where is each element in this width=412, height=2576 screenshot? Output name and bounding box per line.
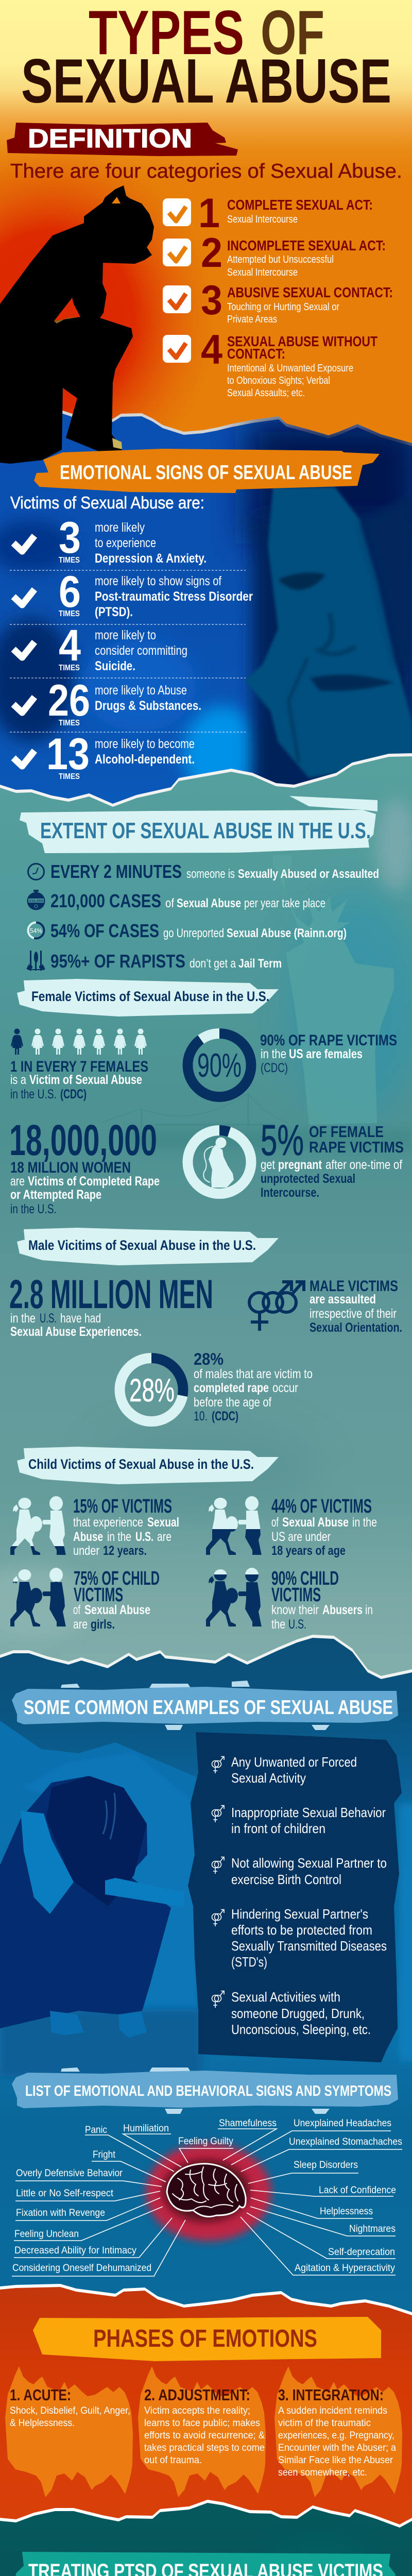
photo: grieving woman's face	[245, 487, 412, 778]
stat: 1 in every 7 females: Victim of Sexual Abuse	[29, 1073, 142, 1087]
stat: 5 percent of female rape victims: unprotected Sexual	[261, 1172, 355, 1186]
stat: 28 percent of males: 28%	[194, 1350, 224, 1368]
stat: 2.8 million men: have had	[60, 1311, 101, 1326]
label: feeling unclean	[14, 2207, 163, 2241]
phase: integration: seen somewhere, etc.	[278, 2467, 367, 2478]
stat: 28 percent of males: before the age of	[194, 1395, 271, 1410]
label: unexplained stomachaches: Unexplained Stomachaches	[289, 2137, 402, 2147]
heading: child victims	[17, 1447, 279, 1484]
stat: 90 percent child victims: VICTIMS	[271, 1584, 321, 1606]
panel: definition background	[0, 0, 412, 497]
row: 3 times	[13, 513, 207, 566]
row: 26 times: 26	[48, 676, 90, 725]
example 4: efforts to be protected from	[231, 1922, 372, 1938]
phase: adjustment: takes practical steps to come	[144, 2443, 265, 2453]
heading: child victims: Child Victims of Sexual Abuse in the U.S.	[28, 1456, 254, 1472]
stat: 2.8 million men: in the	[10, 1311, 36, 1326]
example 4: Sexually Transmitted Diseases	[231, 1938, 387, 1954]
stat: every 2 minutes	[28, 861, 379, 882]
row: 26 times: Drugs & Substances.	[95, 699, 201, 713]
phase: acute: Shock, Disbelief, Guilt, Anger,	[10, 2405, 130, 2416]
stat: 90 percent child victims: the	[271, 1617, 285, 1632]
chart: 28 percent donut	[119, 1358, 183, 1421]
stat: 2.8 million men: 2.8 MILLION MEN	[9, 1271, 213, 1317]
item 2	[163, 230, 386, 278]
chart: 90 percent donut	[187, 1033, 251, 1097]
row: 6 times: TIMES	[59, 609, 80, 618]
phase: integration: 3. INTEGRATION:	[278, 2386, 384, 2404]
item 2: 2	[201, 230, 222, 276]
label: decreased ability for intimacy	[14, 2218, 172, 2258]
example 5: someone Drugged, Drunk,	[231, 2006, 365, 2021]
row: 4 times: consider committing	[95, 643, 187, 658]
heading: male victims	[17, 1228, 279, 1265]
label: agitation and hyperactivity: Agitation & Hyperactivity	[295, 2263, 395, 2274]
phase: acute	[5, 2366, 133, 2497]
photo: silhouette of bent-over figure	[0, 185, 154, 464]
stat: 1 in every 7 females: 1 IN EVERY 7 FEMALES	[10, 1058, 148, 1075]
label: agitation and hyperactivity	[241, 2217, 396, 2275]
label: sleep disorders: Sleep Disorders	[294, 2160, 358, 2171]
heading: signs and symptoms	[12, 2067, 398, 2114]
chart: 5 percent pregnancy donut	[187, 1130, 251, 1194]
item 4: SEXUAL ABUSE WITHOUT	[227, 333, 377, 349]
icon: children 90 percent filled	[206, 1568, 262, 1626]
example 1	[212, 1754, 357, 1786]
stat: male victims orientation	[310, 1278, 402, 1335]
text: four categories intro: There are four categories of Sexual Abuse.	[10, 160, 402, 182]
stat: 2.8 million men: U.S.	[40, 1311, 57, 1326]
stat: 18 million women: are	[10, 1174, 25, 1189]
stat: 44 percent of victims: 18 years of age	[271, 1544, 346, 1558]
stat: 1 in every 7 females: is a	[10, 1073, 26, 1087]
icon: jail bars	[26, 951, 45, 971]
example 2: Inappropriate Sexual Behavior	[231, 1805, 386, 1820]
label: nightmares	[250, 2207, 396, 2236]
icon: children 44 percent filled	[206, 1496, 262, 1555]
stat: 15 percent of victims: 15% OF VICTIMS	[73, 1496, 172, 1517]
row: 13 times: 13	[46, 730, 90, 779]
label: little or no self-respect: Little or No Self-respect	[16, 2188, 114, 2199]
stat: every 2 minutes: Sexually Abused or Assaulted	[238, 867, 379, 881]
item 1: 1	[198, 190, 220, 236]
glow behind brain	[146, 2143, 271, 2241]
item 3: Private Areas	[227, 314, 277, 325]
item 4: Intentional & Unwanted Exposure	[227, 363, 353, 374]
pictogram: 1 in 7 females	[11, 1028, 147, 1055]
heading: common examples	[12, 1681, 398, 1730]
stat: 5 percent of female rape victims: pregnant	[278, 1158, 322, 1172]
label: lack of confidence: Lack of Confidence	[319, 2185, 396, 2196]
label: overly defensive behavior	[15, 2168, 162, 2187]
stat: 95% of rapists: don’t get a	[190, 957, 236, 971]
row: 3 times: Depression & Anxiety.	[95, 551, 207, 566]
stat: 44 percent of victims: of	[271, 1515, 279, 1530]
icon: clock	[28, 863, 44, 880]
panel: treating PTSD background	[0, 2500, 412, 2576]
icon: 54 percent ring	[28, 922, 44, 939]
stat: 15 percent of victims: 12 years.	[103, 1544, 147, 1558]
phase: integration: Encounter with the Abuser; a	[278, 2443, 396, 2453]
icon: pregnant woman	[203, 1138, 234, 1188]
panel: examples list	[188, 1732, 402, 2062]
label: panic: Panic	[85, 2125, 107, 2136]
row: 26 times: TIMES	[59, 719, 80, 727]
phase: adjustment: learns to face public; makes	[144, 2418, 260, 2429]
label: shamefulness: Shamefulness	[219, 2118, 277, 2129]
text: victims intro: Victims of Sexual Abuse are:	[10, 493, 204, 512]
row: 6 times: 6	[59, 567, 81, 617]
label: humiliation	[123, 2123, 181, 2167]
stat: 54% of cases: Sexual Abuse (Rainn.org)	[227, 926, 347, 940]
photo: statue of liberty	[273, 855, 394, 1125]
icon: children 75 percent filled	[10, 1568, 66, 1626]
label: fixation with revenge: Fixation with Revenge	[16, 2208, 105, 2218]
item 1: COMPLETE SEXUAL ACT:	[227, 197, 373, 213]
example 1: Any Unwanted or Forced	[231, 1754, 357, 1770]
phase: acute: 1. ACUTE:	[10, 2386, 71, 2404]
icon: stopwatch	[27, 890, 45, 910]
panel: phases background	[0, 2284, 412, 2548]
chart: 90 percent donut: 90%	[197, 1046, 242, 1084]
label: lack of confidence	[250, 2185, 396, 2196]
item 2: Attempted but Unsuccessful	[227, 254, 334, 265]
stat: 90 percent of rape victims: (CDC)	[261, 1061, 288, 1075]
stat: 54% of cases: 54% OF CASES	[50, 920, 159, 941]
stat: 90 percent of rape victims: in the	[261, 1047, 286, 1061]
stat: 15 percent of victims: under	[73, 1544, 99, 1558]
phase: adjustment: Victim accepts the reality;	[144, 2405, 250, 2416]
example 2: in front of children	[231, 1821, 325, 1836]
stat: 18 million women: Victims of Completed Rape	[28, 1174, 160, 1189]
phase: integration: A sudden incident reminds	[278, 2405, 387, 2416]
row: 13 times: TIMES	[59, 772, 80, 781]
stat: 210,000 cases: 210,000 CASES	[50, 890, 161, 911]
stat: 44 percent of victims	[206, 1496, 377, 1558]
stat: 210,000 cases: Sexual Abuse	[177, 896, 241, 910]
stat: 54% of cases: go Unreported	[163, 926, 224, 940]
stat: 2.8 million men	[9, 1271, 213, 1339]
stat: 75 percent of child victims: are	[73, 1617, 88, 1632]
label: fixation with revenge	[15, 2198, 160, 2221]
stat: 15 percent of victims: that experience	[73, 1515, 143, 1530]
row: 4 times: Suicide.	[95, 659, 135, 673]
example 5	[212, 1989, 371, 2037]
heading: female victims: Female Victims of Sexual Abuse in the U.S.	[31, 989, 269, 1004]
item 4: to Obnoxious Sights; Verbal	[227, 375, 330, 386]
stat: 75 percent of child victims: VICTIMS	[74, 1584, 123, 1606]
row: 6 times	[13, 567, 253, 619]
item 3: Touching or Hurting Sexual or	[227, 301, 339, 313]
row: 4 times: 4	[59, 621, 81, 670]
heading: treating PTSD	[14, 2552, 396, 2576]
heading: female victims	[17, 979, 279, 1016]
list: times more likely statistics	[10, 513, 253, 781]
icon: brain	[167, 2164, 246, 2217]
stat: 44 percent of victims: in the	[352, 1515, 377, 1530]
example 3: Not allowing Sexual Partner to	[231, 1855, 387, 1871]
label: unexplained stomachaches	[241, 2137, 402, 2172]
row: 6 times: more likely to show signs of	[95, 574, 221, 588]
stat: 210,000 cases	[27, 890, 325, 911]
panel: extent background	[0, 753, 412, 1703]
title	[21, 0, 391, 116]
stat: 75 percent of child victims: girls.	[91, 1617, 115, 1632]
stat: 15 percent of victims: are	[157, 1530, 171, 1544]
stat: 75 percent of child victims: 75% OF CHILD	[74, 1568, 160, 1589]
stat: 1 in every 7 females: in the U.S.	[10, 1087, 57, 1101]
chart: brain with symptom labels	[12, 2118, 402, 2276]
label: feeling unclean: Feeling Unclean	[14, 2229, 79, 2240]
stat: 95% of rapists: Jail Term	[238, 957, 282, 971]
stat: 90 percent child victims: U.S.	[288, 1617, 306, 1632]
label: sleep disorders	[248, 2160, 358, 2183]
row: 4 times: more likely to	[95, 628, 156, 642]
chart: 28 percent donut: 28%	[129, 1372, 175, 1409]
stat: 44 percent of victims: Sexual Abuse	[282, 1515, 349, 1530]
stat: 5 percent of female rape victims: get	[261, 1158, 275, 1172]
example 5: Sexual Activities with	[231, 1989, 340, 2005]
stat: 210,000 cases: of	[165, 896, 174, 910]
phase: acute: & Helplessness.	[10, 2418, 75, 2429]
stat: 90 percent child victims: Abusers	[322, 1603, 363, 1617]
phase: integration: experiences, e.g. Pregnancy,	[278, 2430, 394, 2441]
stat: 44 percent of victims: US are under	[271, 1530, 331, 1544]
stat: 5 percent of female rape victims	[261, 1116, 404, 1200]
stat: 15 percent of victims: Abuse	[73, 1530, 103, 1544]
row: 4 times	[13, 621, 187, 673]
heading: extent of abuse	[20, 796, 377, 853]
label: helplessness: Helplessness	[320, 2206, 373, 2217]
stat: 90 percent child victims: know their	[271, 1603, 319, 1617]
label: little or no self-respect	[15, 2188, 160, 2201]
label: feeling guilty: Feeling Guilty	[178, 2136, 233, 2147]
label: considering oneself dehumanized: Considering Oneself Dehumanized	[12, 2263, 151, 2274]
stat: 90 percent child victims: in	[365, 1603, 373, 1617]
label: humiliation: Humiliation	[123, 2123, 169, 2134]
phase: adjustment: efforts to avoid recurrence; &	[144, 2430, 265, 2441]
stat: 28 percent of males: 10.	[194, 1409, 208, 1423]
stat: 1 in every 7 females	[10, 1058, 148, 1101]
stat: 90 percent child victims	[206, 1568, 373, 1632]
icon: gender symbols	[249, 1282, 304, 1331]
label: panic	[85, 2125, 174, 2172]
item 4: 4	[201, 327, 222, 373]
stat: 28 percent of males: (CDC)	[212, 1409, 238, 1423]
stat: 28 percent of males: completed rape	[194, 1381, 269, 1395]
photo: bridge	[103, 1092, 288, 1127]
row: 3 times: to experience	[95, 536, 156, 550]
row: 26 times: more likely to Abuse	[95, 683, 187, 698]
phase: integration	[274, 2366, 402, 2497]
example 4	[212, 1906, 387, 1970]
stat: 15 percent of victims: U.S.	[135, 1530, 153, 1544]
item 1	[163, 190, 373, 236]
panel: emotional signs background	[0, 411, 412, 827]
row: 3 times: TIMES	[59, 556, 80, 565]
stat: 15 percent of victims: in the	[107, 1530, 131, 1544]
stat: 28 percent of males	[194, 1350, 313, 1423]
row: 4 times: TIMES	[59, 664, 80, 672]
item 3: 3	[201, 277, 222, 324]
label: nightmares: Nightmares	[349, 2224, 396, 2234]
row: 3 times: more likely	[95, 520, 145, 535]
photo: distressed woman	[0, 1776, 184, 2038]
phase: adjustment	[138, 2366, 266, 2497]
stat: 28 percent of males: of males that are victim to	[194, 1367, 313, 1381]
row: 13 times: Alcohol-dependent.	[95, 752, 195, 767]
icon: stopwatch: 210,000	[29, 900, 43, 903]
heading: male victims: Male Vicitims of Sexual Abuse in the U.S.	[28, 1238, 256, 1253]
stat: 15 percent of victims	[10, 1496, 179, 1558]
phase: adjustment: out of trauma.	[144, 2455, 202, 2466]
example 5: Unconscious, Sleeping, etc.	[231, 2022, 371, 2037]
stat: 18 million women: or Attempted Rape	[10, 1188, 101, 1202]
phase: adjustment: 2. ADJUSTMENT:	[144, 2386, 250, 2404]
stat: every 2 minutes: someone is	[186, 867, 235, 881]
stat: 18 million women: 18 MILLION WOMEN	[10, 1159, 131, 1176]
item 4: CONTACT:	[227, 346, 285, 362]
heading: phases of emotions	[33, 2317, 381, 2361]
label: unexplained headaches	[231, 2118, 391, 2165]
stat: male victims orientation: are assaulted	[310, 1292, 376, 1307]
stat: 95% of rapists: 95%+ OF RAPISTS	[50, 951, 185, 972]
stat: 90 percent of rape victims: US are females	[289, 1047, 363, 1061]
stat: 18 million women	[9, 1116, 160, 1216]
label: self-deprecation	[247, 2213, 396, 2259]
stat: 5 percent of female rape victims: 5%	[261, 1116, 304, 1164]
item 1: Sexual Intercourse	[227, 214, 298, 225]
heading: phases of emotions: PHASES OF EMOTIONS	[93, 2325, 317, 2352]
label: overly defensive behavior: Overly Defensive Behavior	[16, 2168, 123, 2179]
heading: emotional signs	[34, 449, 380, 493]
stat: 54% of cases	[28, 920, 347, 941]
row: 26 times	[13, 676, 201, 727]
stat: 75 percent of child victims: Sexual Abuse	[84, 1603, 150, 1617]
stat: 15 percent of victims: Sexual	[147, 1515, 179, 1530]
stat: 18 million women: in the U.S.	[10, 1202, 57, 1216]
example 3: exercise Birth Control	[231, 1872, 341, 1887]
icon: 54 percent ring: 54%	[30, 927, 42, 935]
row: 13 times	[13, 730, 195, 781]
label: considering oneself dehumanized	[12, 2220, 185, 2276]
row: 6 times: Post-traumatic Stress Disorder	[95, 589, 253, 604]
example 3	[212, 1855, 387, 1887]
label: helplessness	[251, 2198, 373, 2218]
phase: integration: Similar Face like the Abuser	[278, 2455, 393, 2466]
icon: children 15 percent filled	[10, 1496, 66, 1555]
stat: 90 percent of rape victims	[260, 1032, 397, 1075]
phase: integration: victim of the traumatic	[278, 2418, 371, 2429]
stat: 95% of rapists	[26, 951, 282, 972]
label: shamefulness	[218, 2118, 277, 2160]
label: fright	[92, 2149, 166, 2182]
label: decreased ability for intimacy: Decreased Ability for Intimacy	[14, 2245, 136, 2256]
stat: 210,000 cases: per year take place	[244, 896, 325, 910]
item 2: Sexual Intercourse	[227, 267, 298, 278]
stat: 75 percent of child victims	[10, 1568, 160, 1632]
panel: common examples background	[0, 1635, 412, 2332]
list: four categories	[163, 190, 393, 399]
label: fright: Fright	[93, 2149, 116, 2160]
stat: 5 percent of female rape victims: Intercourse.	[261, 1185, 319, 1200]
heading: definition	[7, 123, 238, 156]
stat: 2.8 million men: Sexual Abuse Experiences.	[10, 1325, 142, 1339]
label: self-deprecation: Self-deprecation	[328, 2247, 395, 2258]
stat: 5 percent of female rape victims: OF FEMALE	[309, 1123, 384, 1141]
stat: 75 percent of child victims: of	[73, 1603, 80, 1617]
heading: definition: DEFINITION	[28, 124, 192, 153]
row: 6 times: (PTSD).	[95, 605, 133, 619]
example 4: (STD's)	[231, 1954, 267, 1970]
example 1: Sexual Activity	[231, 1770, 306, 1786]
stat: every 2 minutes: EVERY 2 MINUTES	[50, 861, 182, 882]
item 4: Sexual Assaults; etc.	[227, 387, 305, 399]
label: feeling guilty	[178, 2136, 233, 2163]
row: 13 times: more likely to become	[95, 737, 195, 751]
stat: 18 million women: 18,000,000	[9, 1116, 157, 1164]
item 4	[163, 327, 377, 399]
stat: 28 percent of males: occur	[272, 1381, 298, 1395]
stat: 90 percent child victims: 90% CHILD	[271, 1568, 339, 1589]
row: 3 times: 3	[59, 513, 81, 563]
label: unexplained headaches: Unexplained Headaches	[294, 2118, 391, 2129]
stat: 1 in every 7 females: (CDC)	[60, 1087, 87, 1101]
item 3	[163, 277, 393, 325]
example 2	[212, 1805, 386, 1836]
example 4: Hindering Sexual Partner's	[231, 1906, 368, 1922]
